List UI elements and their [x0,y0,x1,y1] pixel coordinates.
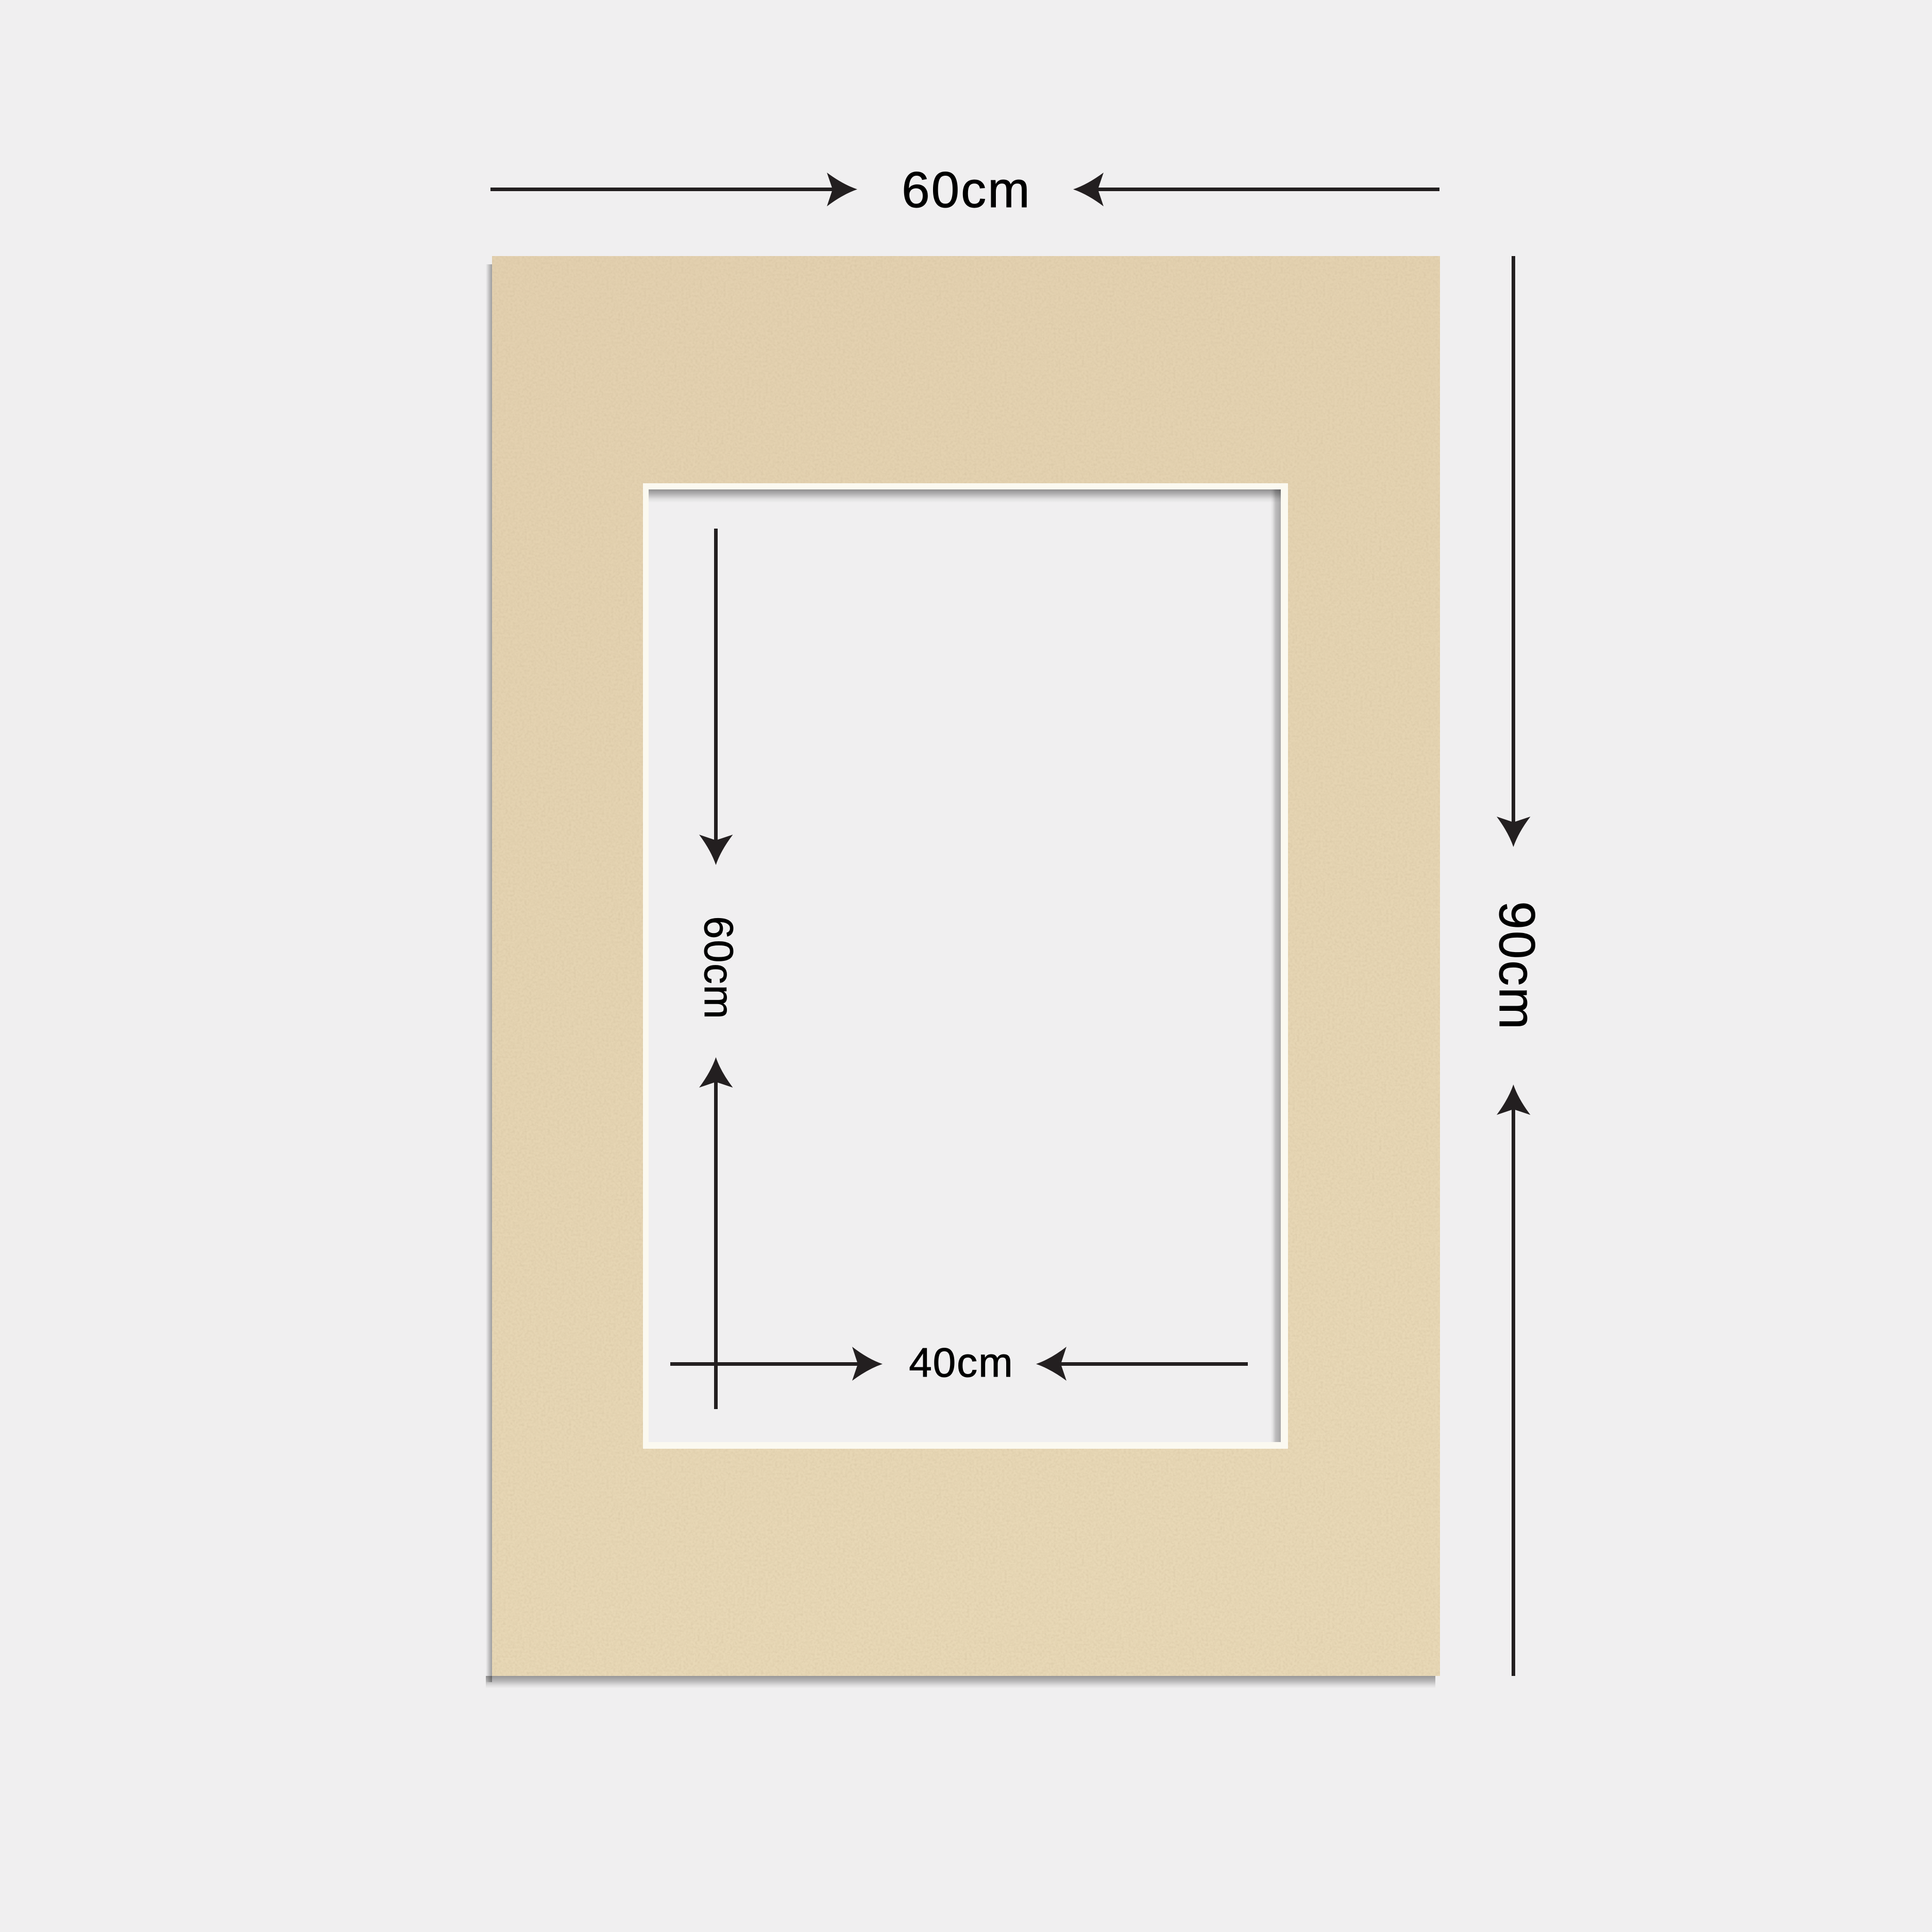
dimension: outer height 90cm [1489,256,1546,1676]
mat paper grain [492,256,1440,1676]
label: 60cm: 60cm [902,161,1031,218]
dimension: window width 40cm [670,1340,1248,1385]
label: 40cm: 40cm [909,1340,1014,1385]
arrow: left to right [490,173,857,206]
arrow: top to bottom [1497,256,1530,847]
arrow: left to right [670,1347,883,1381]
mat board surface with window [492,256,1440,1676]
panel: mat board [486,256,1440,1688]
dimension: window height 60cm [696,529,742,1409]
inner shadow: right [1270,489,1281,1442]
label: 60cm: 60cm [696,916,742,1020]
arrow: right to left [1073,173,1439,206]
window opening [643,483,1288,1449]
arrow: bottom to top [1497,1084,1530,1676]
arrow: bottom to top [699,1057,733,1409]
arrow: right to left [1036,1347,1248,1381]
label: 90cm: 90cm [1489,901,1546,1031]
mat outer shadow [486,264,1435,1688]
inner shadow: top [649,489,1281,503]
white bevel [643,483,1288,1449]
arrow: top to bottom [699,529,733,865]
dimension: outer width 60cm [490,161,1439,218]
